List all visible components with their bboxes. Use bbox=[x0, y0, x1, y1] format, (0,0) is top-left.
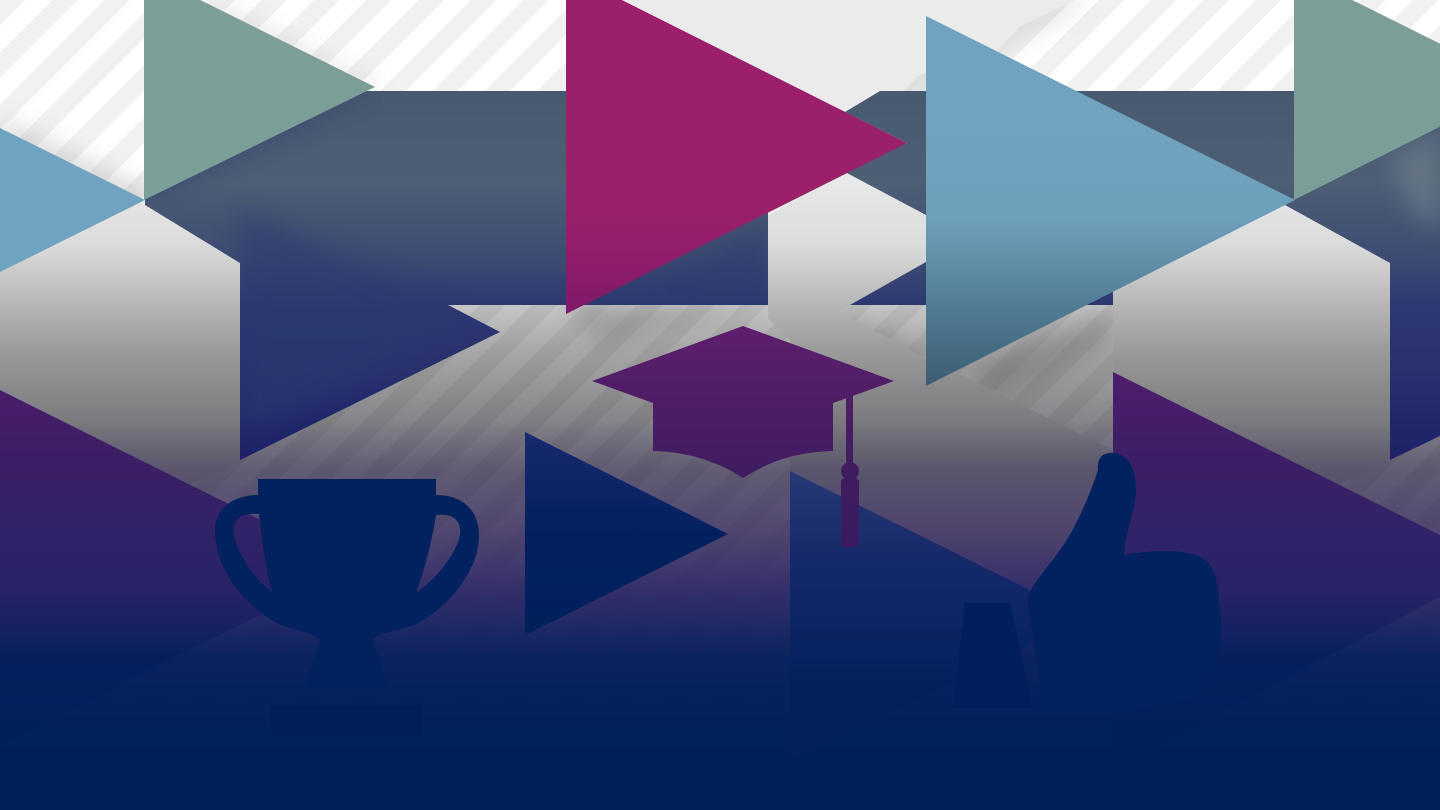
icon: graduation cap bbox=[592, 326, 894, 547]
right grey hexagon bbox=[1113, 205, 1390, 485]
navy play triangle bbox=[525, 432, 728, 635]
navy shading on left dark band bbox=[158, 104, 766, 414]
dark band left with arrow bbox=[145, 91, 768, 460]
right green triangle bbox=[1294, 0, 1440, 200]
magenta triangle bbox=[566, 0, 907, 314]
left green triangle bbox=[144, 0, 375, 200]
light streak on right dark band bbox=[1388, 130, 1440, 228]
large blue triangle bbox=[926, 16, 1295, 386]
centre lower triangle bbox=[790, 471, 1040, 760]
navy fade overlay bbox=[0, 420, 1440, 810]
left blue triangle bbox=[0, 128, 145, 272]
soft shadows on stripes bbox=[0, 0, 1113, 395]
centre white hexagon bbox=[768, 172, 1113, 620]
right purple triangle bbox=[1113, 372, 1440, 770]
dark band right bbox=[845, 91, 1440, 460]
shading gradient over light layers bbox=[0, 170, 1440, 810]
icon: thumbs up bbox=[953, 453, 1221, 715]
top centre pale panel bbox=[600, 0, 1075, 112]
left grey hexagon bbox=[0, 198, 240, 485]
left purple triangle bbox=[0, 390, 355, 745]
icon: trophy bbox=[215, 479, 479, 735]
